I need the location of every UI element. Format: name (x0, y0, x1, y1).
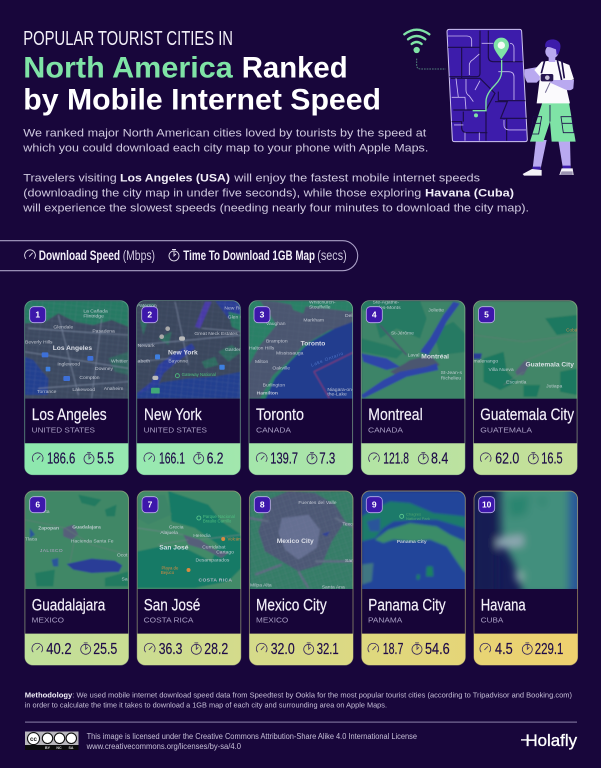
kicker: POPULAR TOURIST CITIES IN (23, 28, 233, 50)
stats bar: 25.5 (93, 641, 117, 658)
start dot (474, 113, 478, 117)
map: Toronto (249, 299, 356, 401)
panel: Havana (474, 485, 583, 665)
rank badge (142, 497, 158, 513)
dashed connector (417, 59, 446, 69)
map: Los Angeles: Downey (95, 366, 114, 372)
map: Los Angeles: Anaheim (104, 386, 123, 392)
map: Guatemala City (474, 301, 580, 401)
map: Mexico City: San (345, 558, 354, 564)
stats bar (137, 443, 240, 475)
legend pill (0, 241, 358, 271)
stats bar (25, 443, 128, 475)
panel: Panama City (362, 491, 468, 665)
stats bar: 8.4 (431, 451, 449, 468)
title line 2: by Mobile Internet Speed (23, 83, 381, 116)
title line 1 highlight: North America (23, 51, 233, 84)
map: Montreal: Laval (408, 352, 420, 358)
rank badge (478, 307, 494, 323)
country: MEXICO (256, 616, 288, 625)
findings text: Travelers visiting (23, 173, 117, 185)
map: Guatemala City: Escuintla (506, 380, 527, 386)
rank badge (254, 497, 270, 513)
map: Los Angeles: Beverly Hills (25, 340, 53, 346)
findings text: Los Angeles (USA) (120, 173, 230, 185)
map: New York: Glen C (228, 314, 244, 320)
map: Toronto: Niagara-on- (327, 387, 354, 393)
map: Panama City (362, 491, 468, 591)
panel: Guadalajara (25, 491, 132, 665)
map: Los Angeles: Whittier (111, 359, 128, 365)
phone map (447, 29, 527, 142)
route (473, 60, 502, 111)
map: Toronto: Toronto (301, 340, 325, 347)
findings text: (downloading the city map in under five seconds), while those exploring (23, 188, 421, 200)
title line 1: Ranked (242, 51, 348, 84)
stats bar (137, 634, 241, 665)
map: Guatemala City: Villa Nueva (488, 367, 514, 373)
map: San José: Volcán (228, 537, 241, 542)
city name: Toronto (256, 406, 304, 424)
title (23, 28, 381, 116)
license text: www.creativecommons.org/licenses/by-sa/4.0 (86, 742, 242, 751)
city name: Guadalajara (32, 597, 106, 615)
map: Guadalajara: Zapopan (38, 526, 59, 532)
city name: Mexico City (256, 597, 327, 615)
map: Los Angeles: Flintridge (83, 314, 104, 320)
map: Mexico City: Santa Ana (322, 585, 345, 591)
license text: This image is licensed under the Creative Commons Attribution-Share Alike 4.0 International License (87, 732, 418, 741)
icon: wifi (404, 30, 429, 52)
stats bar: 54.6 (425, 641, 450, 658)
rank badge: 4 (372, 310, 377, 320)
icon: creative commons badge: cc (30, 736, 37, 743)
city name: New York (144, 406, 202, 424)
panel: Toronto (249, 299, 356, 475)
map: Guadalajara: Guadalajara (72, 525, 101, 531)
findings text: will enjoy the fastest mobile internet speeds (233, 173, 480, 185)
map: Toronto: Hamilton (257, 390, 278, 396)
icon: location pin (494, 38, 509, 59)
stats bar: 139.7 (270, 451, 298, 468)
map: Montreal: St-Jérôme (391, 331, 414, 337)
stats bar (361, 443, 465, 475)
stats bar: 32.1 (317, 641, 339, 658)
map: San José: Desamparados (196, 557, 230, 563)
intro text: which you could download each city map to your phone with Apple Maps. (22, 143, 428, 155)
stats bar (249, 634, 353, 665)
map: Toronto: Oakville (272, 365, 290, 371)
map: Panama City: Panama City (397, 539, 427, 545)
map: Guadalajara: JALISCO (40, 548, 63, 554)
stats bar (362, 634, 465, 665)
methodology note: in order to calculate the time it takes to download a 1GB map of each city and surrounding area on Apple Maps. (25, 700, 387, 710)
icon: creative commons badge (25, 732, 78, 750)
city name: Los Angeles (32, 406, 107, 424)
map: San José: Curridabat (202, 545, 226, 551)
map: Montreal: Ste-Agathe- (373, 300, 400, 306)
stats bar: 229.1 (535, 641, 563, 658)
stats bar: 186.6 (47, 451, 75, 468)
stats bar: 32.0 (271, 641, 295, 658)
stats bar: 121.8 (383, 451, 409, 468)
rank badge (30, 497, 46, 513)
map: San José: Alajuela (160, 530, 178, 536)
city name: Guatemala City (480, 406, 575, 424)
map: Havana (blurred) (474, 491, 578, 589)
map: Toronto: Lake Ontario (310, 351, 344, 368)
map: Toronto: the-Lake (327, 392, 347, 398)
rank badge (142, 307, 158, 323)
stats bar (474, 634, 578, 665)
country: CUBA (481, 616, 504, 625)
rank badge: 7 (148, 500, 153, 510)
map: Toronto: Milton (255, 359, 269, 365)
map: Montreal: Joliette (428, 308, 444, 314)
map: New York: Garden C (225, 347, 247, 353)
map: Toronto: Brampton (266, 338, 288, 344)
map: Mexico City: Texcoco (342, 521, 361, 527)
stats bar: 4.5 (495, 641, 513, 658)
map: San José: Grecia (169, 525, 184, 531)
map: Montreal (361, 300, 468, 401)
methodology note: Methodology (25, 690, 73, 700)
panel: Los Angeles (25, 301, 131, 475)
stats bar (474, 443, 577, 475)
map: Guadalajara (25, 491, 132, 591)
map: Guatemala City: malenango (473, 358, 498, 364)
map: Toronto: Halton Hills (249, 346, 275, 352)
map: Toronto: Burlington (263, 382, 285, 388)
rank badge (254, 307, 270, 323)
stats bar (249, 443, 353, 475)
city name: Montreal (368, 406, 423, 424)
panel: San José (137, 491, 244, 665)
map: New York: abeth (138, 358, 150, 364)
panel: Mexico City (249, 491, 361, 665)
map: Montreal: Richelieu (441, 375, 461, 381)
icon: creative commons badge: BY (45, 746, 51, 750)
rank badge: 9 (372, 500, 377, 510)
person (523, 39, 576, 176)
findings text: will experience the slowest speeds (needing nearly four minutes to download the city map). (22, 203, 529, 215)
map: San José: COSTA RICA (199, 577, 232, 583)
map: San José: Parque Nacional (203, 514, 235, 519)
rank badge (366, 497, 382, 513)
methodology note: : We used mobile internet download speed data from Speedtest by Ookla for the most popular tourist cities (according to Tripadvisor and Booking.com) (72, 690, 572, 700)
map: Los Angeles: La Cañada (83, 309, 108, 315)
rank badge: 1 (35, 310, 40, 320)
map: San José (137, 491, 244, 591)
country: GUATEMALA (480, 426, 533, 435)
map: Los Angeles: Pasadena (92, 328, 115, 334)
stats bar: 36.3 (159, 641, 182, 658)
panel: Guatemala City (474, 301, 580, 475)
icon: creative commons badge: NC (56, 746, 62, 750)
panel: New York (137, 301, 247, 475)
country: CANADA (256, 426, 292, 435)
country: UNITED STATES (32, 426, 95, 435)
findings text: Havana (Cuba) (425, 188, 514, 200)
rank badge (30, 307, 46, 323)
illustration: traveller with map (404, 29, 576, 176)
panel: Montreal (361, 300, 468, 475)
map: Toronto: Whitchurch- (309, 299, 336, 305)
map: New York: Newark (138, 343, 155, 349)
legend: download speed: Download Speed (39, 248, 120, 263)
map: New York: Bayonne (168, 358, 188, 364)
city name: Havana (481, 597, 526, 615)
intro text (22, 128, 428, 155)
intro text: We ranked major North American cities loved by tourists by the speed at (23, 128, 427, 140)
map: Mexico City (249, 491, 361, 591)
city name: Panama City (368, 597, 446, 615)
map: Panama City: National Park (406, 516, 430, 521)
stats bar: 6.2 (207, 451, 223, 468)
map: San José: Cartago (216, 549, 234, 555)
map: Guatemala City: Cobán (566, 327, 580, 332)
map: Mexico City: Fuentes del Valle (298, 500, 337, 506)
map: San José: Playa de (162, 565, 179, 570)
stats bar (25, 634, 128, 665)
map: Montreal: St-Jean-s (441, 370, 462, 376)
stats bar: 28.2 (204, 641, 228, 658)
map: Los Angeles: Inglewood (57, 362, 80, 368)
rank badge: 5 (484, 310, 489, 320)
stats bar: 16.5 (541, 451, 563, 468)
stats bar: 40.2 (46, 641, 72, 658)
map: San José: Heredia (193, 533, 211, 539)
map: Guadalajara: Hacienda Santa Fe (71, 539, 114, 545)
map: Toronto: Del (345, 313, 352, 319)
map: San José: Bejuco (161, 570, 175, 575)
map: Guadalajara: Tlaca (25, 536, 37, 542)
rank badge: 10 (482, 500, 492, 510)
country: MEXICO (32, 616, 64, 625)
map: Los Angeles: Torrance (37, 389, 57, 395)
map: Toronto: Markham (303, 318, 324, 324)
findings text (22, 173, 529, 215)
map: Guatemala City: Jutiapa (546, 384, 562, 390)
map: Toronto: Mississauga (276, 350, 304, 356)
map: Montreal: des-Monts (377, 305, 401, 311)
rank badge: 8 (260, 500, 265, 510)
stats bar: 62.0 (495, 451, 520, 468)
map: New York: Paterson (137, 303, 157, 309)
map: Guatemala City: Guatemala City (525, 362, 574, 369)
map: Panama City: Chagres (406, 511, 421, 516)
map: Los Angeles (25, 301, 131, 401)
map: San José: San José (159, 545, 189, 552)
license text (86, 732, 418, 751)
map: Guadalajara: Ocot (117, 553, 128, 559)
map: Guadalajara: Sa (122, 577, 128, 583)
legend: time unit: (secs) (317, 248, 347, 263)
country: COSTA RICA (144, 616, 194, 625)
legend: speed unit: (Mbps) (123, 248, 155, 263)
legend: download time: Time To Download 1GB Map (183, 248, 315, 263)
stats bar: 5.5 (97, 451, 114, 468)
icon: gauge (25, 250, 35, 258)
methodology note (25, 690, 572, 710)
rank badge (366, 307, 382, 323)
country: UNITED STATES (144, 426, 207, 435)
rank badge: 2 (147, 310, 152, 320)
stats bar: 18.7 (383, 641, 403, 658)
map: New York: Gateway National (182, 372, 216, 377)
stats bar: 7.3 (319, 451, 335, 468)
country: CANADA (368, 426, 404, 435)
map: Los Angeles: Compton (79, 375, 100, 381)
map: Toronto: Stouffville (309, 304, 331, 310)
map: Los Angeles: Glendale (53, 324, 74, 330)
rank badge (479, 497, 495, 513)
map: Montreal: Montréal (421, 354, 449, 361)
country: PANAMA (368, 616, 403, 625)
icon: creative commons badge: SA (68, 746, 74, 750)
city name: San José (144, 597, 200, 615)
map: New York (137, 301, 247, 401)
logo: Holafly: Holafly (526, 731, 577, 750)
stats bar: 166.1 (159, 451, 185, 468)
map: New York: Great Neck Estates (194, 331, 238, 337)
map: San José: Braulio Carrillo (203, 518, 232, 523)
map: Mexico City: Milpa Alta (250, 582, 272, 588)
map: Toronto: Vaughan (266, 321, 286, 327)
map: Los Angeles: Lakewood (72, 387, 95, 393)
icon: timer (169, 250, 179, 261)
map: Los Angeles: Los Angeles (53, 345, 92, 352)
rank badge: 6 (35, 500, 40, 510)
map: New York: New York (168, 349, 198, 356)
map: Mexico City: Mexico City (277, 538, 314, 545)
rank badge: 3 (260, 310, 265, 320)
map: New York: New Ro (224, 306, 242, 312)
map: Guadalajara: Vilta (40, 509, 50, 515)
